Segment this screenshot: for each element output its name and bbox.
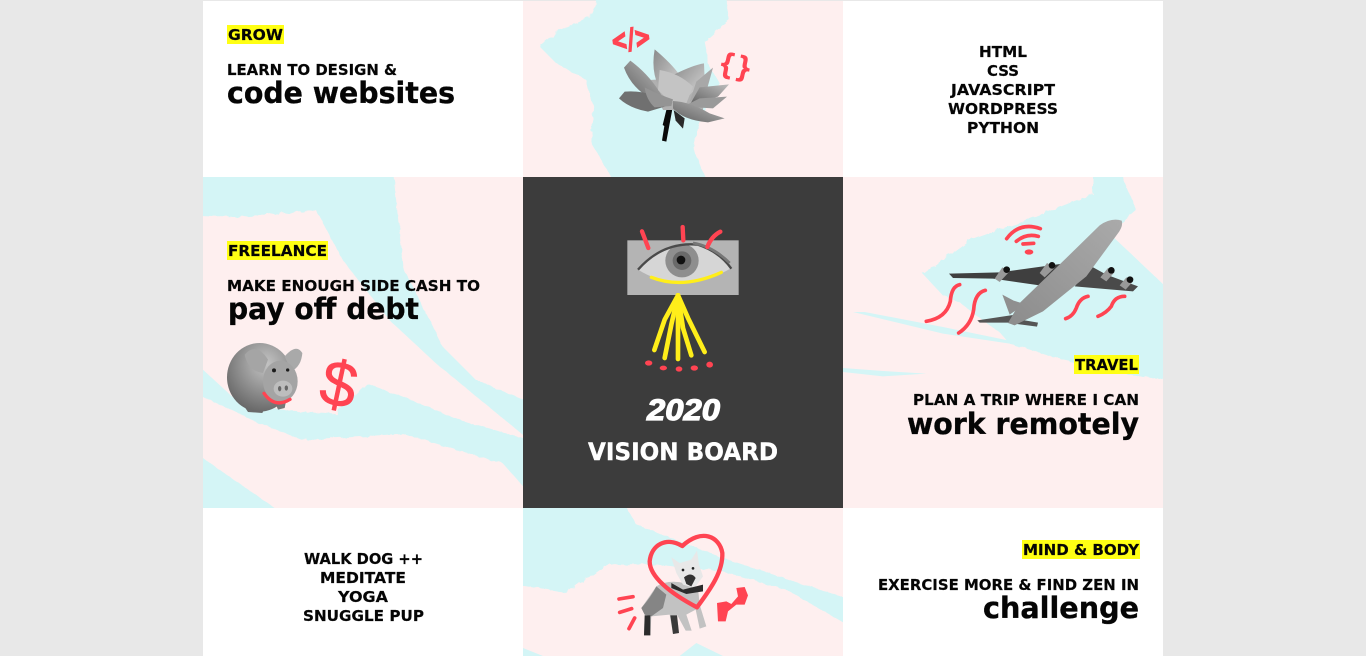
grow heading: code websites	[227, 76, 455, 110]
freelance tag: FREELANCE	[228, 242, 327, 260]
brush stroke: blue upper	[523, 508, 843, 622]
mind and body tag: MIND & BODY	[1023, 541, 1140, 559]
travel tag: TRAVEL	[1075, 356, 1138, 374]
icon: yellow light beams	[654, 295, 705, 359]
panel: center title	[523, 177, 843, 508]
panel: skills list	[843, 1, 1163, 177]
panel: dog illustration	[516, 501, 850, 656]
freelance subheading: MAKE ENOUGH SIDE CASH TO	[227, 277, 480, 295]
panel: lotus illustration	[523, 0, 843, 180]
wellness list text: MEDITATE	[320, 569, 406, 587]
wellness list text: SNUGGLE PUP	[303, 607, 424, 625]
icon: wifi and motion squiggles	[926, 226, 1125, 333]
mind and body subheading: EXERCISE MORE & FIND ZEN IN	[878, 576, 1139, 594]
skills list text: CSS	[987, 62, 1019, 80]
icon: eye with rays	[627, 227, 739, 295]
vision board grid	[203, 0, 1163, 656]
icon: red dots	[645, 360, 713, 372]
icon: heart scribble	[650, 536, 722, 607]
skills list text: WORDPRESS	[948, 100, 1058, 118]
icon: airplane	[949, 220, 1138, 327]
freelance heading: pay off debt	[228, 292, 419, 326]
wellness list text: YOGA	[337, 588, 388, 606]
brush stroke: blue lower left	[523, 648, 543, 656]
panel: travel	[843, 170, 1170, 508]
icon: motion marks	[619, 597, 635, 629]
panel: grow	[203, 1, 523, 177]
travel subheading: PLAN A TRIP WHERE I CAN	[913, 391, 1139, 409]
grow tag: GROW	[228, 26, 283, 44]
icon: curly braces scribble: {}	[715, 46, 756, 86]
title: VISION BOARD	[588, 438, 778, 466]
icon: piggy bank	[227, 343, 302, 413]
icon: dog	[641, 551, 706, 635]
icon: dumbbell	[717, 587, 748, 621]
icon: dollar sign scribble: $	[314, 345, 364, 423]
skills list text: JAVASCRIPT	[950, 81, 1056, 99]
travel heading: work remotely	[907, 407, 1139, 441]
skills list text: HTML	[979, 43, 1027, 61]
wellness list text	[303, 550, 424, 625]
grow subheading: LEARN TO DESIGN &	[227, 61, 397, 79]
brush stroke: blue lower right	[680, 643, 723, 656]
skills list text	[948, 43, 1058, 137]
wellness list text: WALK DOG ++	[304, 550, 423, 568]
panel: wellness list	[203, 508, 523, 656]
panel: freelance	[196, 170, 530, 514]
mind and body heading: challenge	[983, 591, 1139, 625]
icon: lotus flower	[619, 49, 729, 142]
panel: mind and body	[843, 508, 1163, 656]
brush stroke: blue	[540, 0, 730, 180]
year label: 2020	[646, 394, 720, 427]
icon: code tag scribble: </>	[609, 20, 653, 58]
skills list text: PYTHON	[967, 119, 1039, 137]
